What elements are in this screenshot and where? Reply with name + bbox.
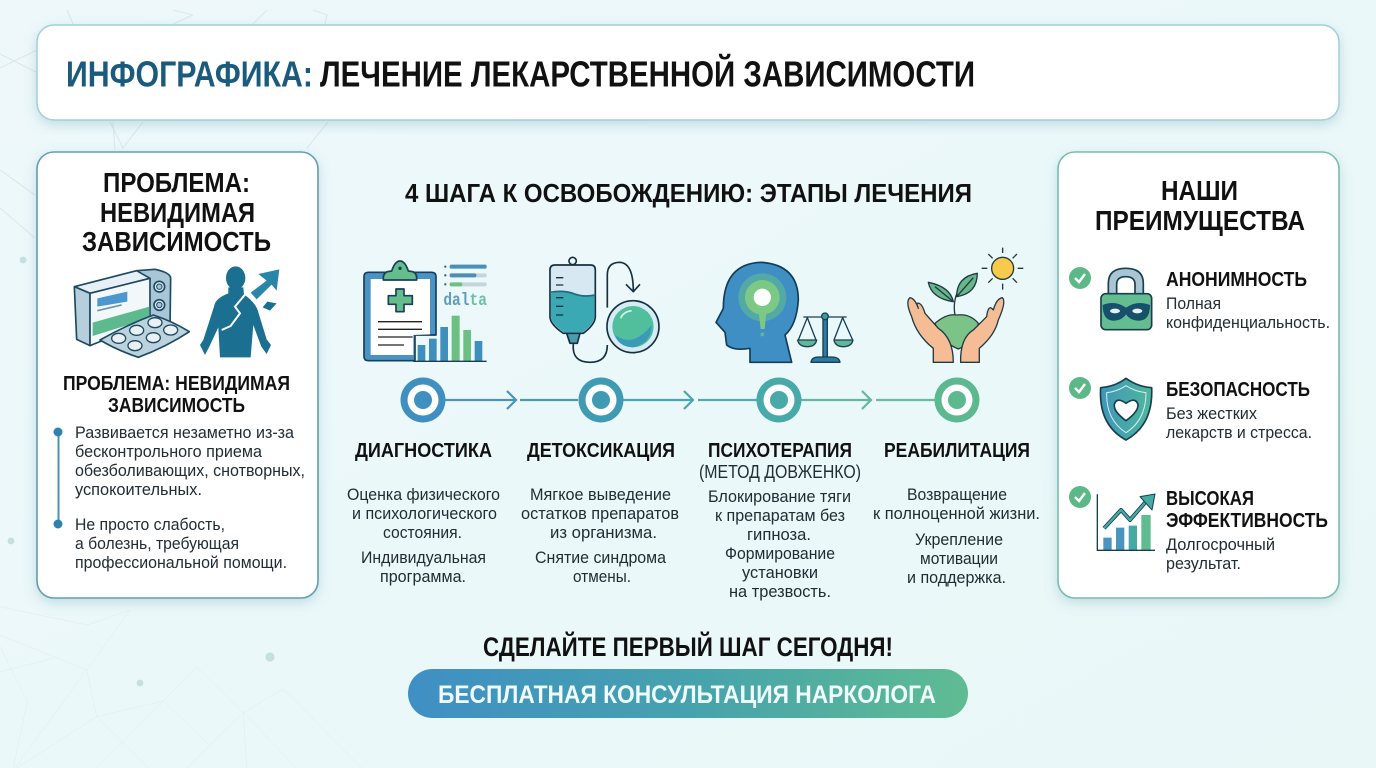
step 4 text	[873, 439, 1040, 587]
icon: clipboard with chart	[364, 261, 487, 361]
call to action button: БЕСПЛАТНАЯ КОНСУЛЬТАЦИЯ НАРКОЛОГА	[438, 681, 936, 709]
step 1 text: Индивидуальная	[361, 548, 486, 567]
bullet text: first: Развивается незаметно из-за	[75, 423, 295, 442]
step 4 text: РЕАБИЛИТАЦИЯ	[884, 439, 1030, 462]
problem heading: ЗАВИСИМОСТЬ	[82, 226, 271, 257]
step 3 text: на трезвость.	[729, 582, 831, 601]
title bar	[37, 25, 1339, 120]
problem subheading: ПРОБЛЕМА: НЕВИДИМАЯ	[63, 372, 290, 395]
bullet text: second	[75, 515, 287, 572]
call to action heading: СДЕЛАЙТЕ ПЕРВЫЙ ШАГ СЕГОДНЯ!	[483, 631, 893, 662]
advantage: anonymity: конфиденциальность.	[1166, 313, 1330, 332]
step 1 text: ДИАГНОСТИКА	[355, 439, 492, 462]
step 2 text	[521, 439, 679, 586]
step node 2	[578, 378, 624, 422]
step 3 text: установки	[742, 563, 818, 582]
step 2 text: ДЕТОКСИКАЦИЯ	[527, 439, 675, 462]
problem heading: НЕВИДИМАЯ	[100, 197, 255, 228]
advantage: safety	[1069, 377, 1312, 442]
step 4 text: Укрепление	[915, 530, 1003, 549]
step 2 text: Мягкое выведение	[530, 485, 671, 504]
check badge	[1069, 377, 1091, 399]
step 2 text: Снятие синдрома	[535, 548, 667, 567]
bullet text: second: профессиональной помощи.	[75, 553, 287, 572]
step 1 text: состояния.	[383, 523, 462, 542]
bullet text: first: успокоительных.	[75, 480, 202, 499]
icon: head with balance scales	[716, 262, 853, 362]
advantage: efficiency: ВЫСОКАЯ	[1166, 487, 1254, 510]
step 4 text: мотивации	[920, 549, 998, 568]
step 3 text: к препаратам без	[715, 506, 845, 525]
icon: IV drip	[550, 257, 659, 362]
step 1 text: программа.	[380, 567, 466, 586]
step 3 text: (МЕТОД ДОВЖЕНКО)	[699, 462, 861, 482]
step 1 text: Оценка физического	[347, 485, 500, 504]
problem heading	[82, 167, 271, 257]
icon: pill box and blister	[74, 269, 189, 357]
step node 3	[756, 378, 802, 422]
icon: clipboard with chart: dalta	[443, 291, 487, 311]
title bar: ЛЕЧЕНИЕ ЛЕКАРСТВЕННОЙ ЗАВИСИМОСТИ	[320, 52, 975, 94]
bullet text: second: Не просто слабость,	[75, 515, 225, 534]
icon: lock with mask	[1101, 268, 1152, 330]
step node 1	[400, 378, 446, 422]
panel: advantages	[1058, 152, 1339, 598]
advantages heading	[1095, 175, 1305, 236]
advantages heading: ПРЕИМУЩЕСТВА	[1095, 205, 1305, 236]
problem subheading	[63, 372, 290, 417]
step 3 text	[699, 439, 861, 601]
problem subheading: ЗАВИСИМОСТЬ	[108, 394, 245, 417]
advantage: efficiency	[1069, 486, 1328, 573]
icon: growth chart	[1097, 494, 1155, 550]
bullet text: first: обезболивающих, снотворных,	[75, 461, 305, 480]
advantage: anonymity: АНОНИМНОСТЬ	[1166, 268, 1307, 291]
icon: hands with sprout and sun	[908, 248, 1023, 362]
steps heading: 4 ШАГА К ОСВОБОЖДЕНИЮ: ЭТАПЫ ЛЕЧЕНИЯ	[405, 178, 972, 208]
advantage: safety: БЕЗОПАСНОСТЬ	[1166, 378, 1310, 401]
step 2 text: отмены.	[573, 567, 631, 586]
step 2 text: из организма.	[550, 523, 657, 542]
call to action button	[408, 669, 968, 718]
panel: problem	[37, 152, 318, 598]
step 3 text: Блокирование тяги	[708, 487, 851, 506]
advantages heading: НАШИ	[1161, 175, 1238, 206]
check badge	[1069, 267, 1091, 289]
bullet text: first	[75, 423, 305, 499]
step 4 text: и поддержка.	[907, 568, 1006, 587]
step 4 text: к полноценной жизни.	[873, 504, 1040, 523]
step 2 text: остатков препаратов	[521, 504, 679, 523]
advantage: efficiency: Долгосрочный	[1166, 535, 1275, 554]
title bar: ИНФОГРАФИКА:	[66, 54, 313, 94]
step 3 text: ПСИХОТЕРАПИЯ	[708, 439, 852, 462]
timeline with nodes and arrows	[400, 378, 980, 422]
step 1 text	[347, 439, 500, 586]
advantage: anonymity	[1069, 267, 1330, 332]
advantage: efficiency: ЭФФЕКТИВНОСТЬ	[1166, 509, 1328, 532]
icon: person with broken arrow	[200, 266, 279, 357]
bullet markers	[54, 428, 62, 528]
bullet text: first: бесконтрольного приема	[75, 442, 263, 461]
advantage: safety: Без жестких	[1166, 404, 1257, 423]
check badge	[1069, 486, 1091, 508]
advantage: safety: лекарств и стресса.	[1166, 423, 1312, 442]
step node 4	[934, 378, 980, 422]
step 3 text: Формирование	[725, 544, 835, 563]
icon: shield with heart	[1100, 378, 1152, 440]
step 1 text: и психологического	[352, 504, 497, 523]
problem heading: ПРОБЛЕМА:	[103, 167, 250, 198]
step 3 text: гипноза.	[747, 525, 811, 544]
advantage: anonymity: Полная	[1166, 294, 1221, 313]
bullet text: second: а болезнь, требующая	[75, 534, 239, 553]
step 4 text: Возвращение	[907, 485, 1007, 504]
advantage: efficiency: результат.	[1166, 554, 1241, 573]
